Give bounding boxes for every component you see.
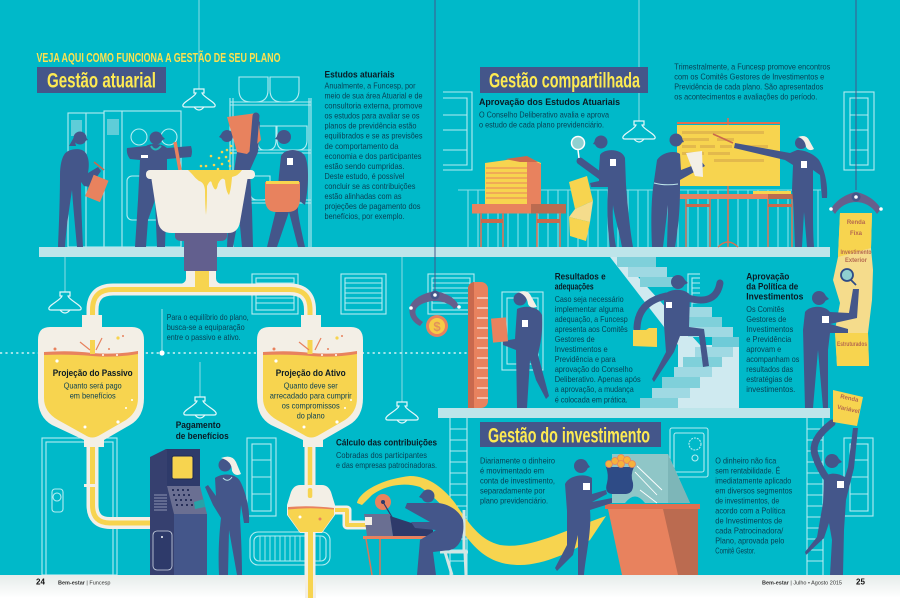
- text block: O dinheiro não fica: acordo com a Política: [715, 505, 786, 515]
- text block: Aprovação dos Estudos Atuariais: Aprovação dos Estudos Atuariais: [479, 97, 620, 108]
- text block: O dinheiro não fica: Plano, aprovada pelo: [715, 535, 785, 545]
- text block: Cálculo das contribuições: e das empresas patrocinadoras.: [336, 460, 437, 470]
- folded paper: [569, 176, 593, 241]
- label: ativo text: os compromissos: [282, 400, 340, 410]
- label: ativo text: do plano: [297, 410, 325, 420]
- text block: equilíbrio do plano: Para o equilíbrio do plano,: [167, 312, 249, 322]
- text block: Estudos atuariais: estão alinhadas com as: [324, 191, 402, 201]
- text block: Aprovação da Política de Investimentos: resultados das: [746, 364, 793, 374]
- figure: man pouring bag: [200, 113, 261, 247]
- text block: Resultados e adequações: adequação, a Funcesp: [555, 314, 628, 324]
- figure: woman on floor with clipboard: [491, 291, 549, 408]
- desk left: [472, 204, 566, 247]
- text block: Estudos atuariais: os estudos para avaliar se os: [324, 111, 420, 121]
- flask: [287, 485, 335, 598]
- panel: glass case and counter: [605, 454, 700, 575]
- hanging claw wire left with coin: [409, 0, 461, 337]
- hanging claw wire left with coin: $: [433, 319, 441, 334]
- text block: Aprovação da Política de Investimentos: Aprovação: [746, 271, 789, 282]
- title: VEJA AQUI COMO FUNCIONA A GESTÃO DE SEU PLANO: [36, 50, 281, 65]
- text block: Resultados e adequações: Previdência e para: [555, 354, 616, 364]
- label: passivo text: Projeção do Passivo: [53, 368, 133, 379]
- footer: 25: [856, 578, 865, 586]
- figure: man running up stairs with folder: [633, 275, 720, 382]
- lamps: [49, 0, 655, 423]
- icon: magnifier on strip: [841, 269, 856, 285]
- text block: Aprovação dos Estudos Atuariais: O Conselho Deliberativo avalia e aprova: [479, 110, 609, 120]
- pot stem and column: [175, 233, 227, 271]
- figure: man reaching magnifier: [803, 269, 859, 408]
- text block: Estudos atuariais: meio de sua área Atuarial e de: [324, 91, 423, 101]
- text block: Cálculo das contribuições: [336, 438, 437, 470]
- staircase: [610, 257, 739, 408]
- figure: woman pointing: [713, 134, 827, 247]
- text block: Pagamento de benefícios: [176, 420, 229, 442]
- dotted balance line: [0, 309, 468, 356]
- wall fixtures: lockers, shelves, windows, vents: [42, 77, 874, 575]
- text block: Aprovação da Política de Investimentos: Gestores de: [746, 314, 787, 324]
- paper: Renda Variável: [833, 390, 863, 426]
- heading: Gestão do investimento: Gestão do investimento: [488, 425, 650, 448]
- text block: Aprovação dos Estudos Atuariais: o estudo de cada plano previdenciário.: [479, 120, 604, 130]
- text block: Diariamente: [480, 455, 555, 505]
- text block: Aprovação dos Estudos Atuariais: [479, 97, 620, 130]
- flipchart: [677, 118, 780, 247]
- text block: Estudos atuariais: projeções de pagamento dos: [324, 201, 420, 211]
- text block: Resultados e adequações: [555, 271, 641, 404]
- text block: O dinheiro não fica: [715, 455, 792, 555]
- paper: Renda Variável: Variável: [836, 405, 860, 415]
- label: ativo text: arrecadado para cumprir: [270, 390, 352, 400]
- text block: Estudos atuariais: [324, 70, 423, 221]
- heading: Gestão do investimento: [480, 422, 661, 448]
- text block: equilíbrio do plano: busca-se a equiparação: [167, 322, 245, 332]
- footer: Bem-estar | Julho • Agosto 2015: [762, 580, 842, 586]
- footer: Bem-estar | Funcesp: [58, 580, 110, 586]
- text block: Diariamente: Diariamente o dinheiro: [480, 455, 555, 465]
- text block: Diariamente: é movimentado em: [480, 465, 544, 475]
- text block: O dinheiro não fica: cada Patrocinadora/: [715, 525, 784, 535]
- text block: Resultados e adequações: Investimentos e: [555, 344, 608, 354]
- text block: Aprovação da Política de Investimentos: Investimentos: [746, 291, 803, 302]
- text block: Trimestralmente: [674, 62, 830, 102]
- panel: typewriter station: [363, 490, 468, 575]
- icon: folder: [633, 328, 657, 347]
- text block: Pagamento de benefícios: Pagamento: [176, 420, 221, 431]
- panel: ATM: [150, 449, 207, 575]
- text block: Resultados e adequações: apresenta aos Comitês: [555, 324, 628, 334]
- text block: O dinheiro não fica: sem rentabilidade. É: [715, 465, 781, 475]
- heading: Gestão compartilhada: [480, 67, 648, 93]
- icon: pot of coins: [606, 454, 636, 494]
- text block: Resultados e adequações: Resultados e: [555, 271, 606, 282]
- upper and lower floors: [39, 247, 830, 418]
- text block: Aprovação da Política de Investimentos: Os Comitês: [746, 304, 784, 314]
- paper: Renda Variável: Renda: [840, 394, 859, 404]
- claw with hanging paper: [829, 0, 883, 366]
- heading: Gestão compartilhada: Gestão compartilhada: [489, 70, 640, 92]
- text block: Trimestralmente: os acontecimentos e avaliações do período.: [674, 92, 817, 102]
- paper: Renda Fixa strip: Exterior: [845, 258, 868, 264]
- text block: O dinheiro não fica: Comitê Gestor.: [715, 545, 755, 555]
- text block: Diariamente: plano previdenciário.: [480, 495, 548, 505]
- text block: Pagamento de benefícios: de benefícios: [176, 431, 229, 442]
- label: ativo text: Quanto deve ser: [284, 380, 338, 390]
- paper: Renda Fixa strip: Investimento: [840, 250, 872, 256]
- text block: Estudos atuariais: benefícios, por exemplo.: [324, 211, 404, 221]
- footer: [0, 575, 900, 598]
- text block: O dinheiro não fica: de investimentos, de: [715, 495, 780, 505]
- text block: Estudos atuariais: de comportamento da: [324, 141, 399, 151]
- text block: O dinheiro não fica: imediatamente aplicado: [715, 475, 792, 485]
- text block: Estudos atuariais: equilibrados e se as previsões: [324, 131, 422, 141]
- text block: equilíbrio do plano: entre o passivo e ativo.: [167, 332, 241, 342]
- text block: Resultados e adequações: adequações: [555, 281, 594, 292]
- text block: Estudos atuariais: Deste estudo, é possível: [324, 171, 405, 181]
- text block: Trimestralmente: Trimestralmente, a Funcesp promove encontros: [674, 62, 830, 72]
- text block: Resultados e adequações: é colocada em prática.: [555, 394, 628, 404]
- paper: Renda Fixa strip: Renda: [847, 220, 866, 226]
- paper: Renda Fixa strip: Estruturados: [837, 342, 868, 348]
- label: passivo text: em benefícios: [70, 390, 116, 400]
- text block: Resultados e adequações: implementar alguma: [555, 304, 624, 314]
- text block: Estudos atuariais: Anualmente, a Funcesp, por: [324, 81, 416, 91]
- text block: Aprovação da Política de Investimentos: aprovam e: [746, 344, 782, 354]
- text block: Resultados e adequações: aprovação do Conselho: [555, 364, 633, 374]
- label: ativo text: Projeção do Ativo: [276, 368, 346, 379]
- figure: typist: [405, 490, 463, 575]
- figure: man with spoon: [127, 132, 192, 247]
- icon: magnifier: [572, 136, 584, 158]
- table right: [678, 191, 802, 247]
- text block: O dinheiro não fica: de Investimentos de: [715, 515, 783, 525]
- label: passivo text: Quanto será pago: [64, 380, 122, 390]
- text block: O dinheiro não fica: O dinheiro não fica: [715, 455, 777, 465]
- footer: 24: [36, 578, 45, 586]
- text block: Estudos atuariais: consultoria externa, promove: [324, 101, 423, 111]
- text block: Aprovação da Política de Investimentos: estratégias de: [746, 374, 793, 384]
- text block: Resultados e adequações: Caso seja necessário: [555, 294, 624, 304]
- text block: Cálculo das contribuições: Cálculo das contribuições: [336, 438, 437, 449]
- figure: woman with clipboard: [58, 132, 109, 247]
- text block: Estudos atuariais: Estudos atuariais: [324, 70, 394, 81]
- figure: man with bowl: [265, 130, 308, 247]
- text block: Aprovação da Política de Investimentos: investimentos.: [746, 384, 795, 394]
- heading: Gestão atuarial: Gestão atuarial: [47, 70, 156, 92]
- figure: jumping man with paper: [805, 390, 863, 575]
- text block: Diariamente: separadamente por: [480, 485, 545, 495]
- figure: man reading paper: [651, 134, 705, 247]
- ribbon of paper: [357, 476, 606, 565]
- stack of reports: [485, 156, 541, 204]
- heading: Gestão atuarial: [37, 67, 166, 93]
- figure: magnifier man: [572, 136, 633, 247]
- text block: Resultados e adequações: Gestores de: [555, 334, 595, 344]
- figure: woman at ATM: [205, 457, 249, 575]
- panel: bag Projeção do Passivo: [38, 315, 144, 447]
- text block: Aprovação da Política de Investimentos: da Política de: [746, 281, 798, 292]
- text block: Aprovação da Política de Investimentos: e Previdência: [746, 334, 792, 344]
- panel: bag Projeção do Ativo: [257, 315, 363, 447]
- ruler: [468, 282, 488, 408]
- text block: Estudos atuariais: concluir se as contribuições: [324, 181, 416, 191]
- text block: Estudos atuariais: planos de previdência estão: [324, 121, 417, 131]
- label: passivo text: [53, 368, 133, 400]
- paper: Renda Fixa strip: [833, 213, 873, 366]
- text block: Resultados e adequações: Deliberativo. Apenas após: [555, 374, 641, 384]
- text block: equilíbrio do plano: [167, 312, 249, 342]
- text block: Cálculo das contribuições: Cobradas dos participantes: [336, 450, 427, 460]
- text block: O dinheiro não fica: em diversos segmentos: [715, 485, 792, 495]
- label: ativo text: [270, 368, 352, 420]
- panel: mixing pot: [146, 170, 255, 233]
- text block: Estudos atuariais: estão sendo cumpridas.: [324, 161, 404, 171]
- text block: Resultados e adequações: a aprovação, a mudança: [555, 384, 634, 394]
- text block: Aprovação da Política de Investimentos: [746, 271, 803, 394]
- text block: Estudos atuariais: economia e dos participantes: [324, 151, 422, 161]
- text block: Trimestralmente: Previdência de cada plano. São apresentados: [674, 82, 823, 92]
- figure: man with coin pot: [555, 454, 636, 575]
- text block: Aprovação da Política de Investimentos: acompanham os: [746, 354, 799, 364]
- text block: Diariamente: conta de investimento,: [480, 475, 555, 485]
- paper: Renda Fixa strip: Fixa: [850, 231, 863, 237]
- text block: Aprovação da Política de Investimentos: Investimentos: [746, 324, 793, 334]
- text block: Trimestralmente: com os Comitês Gestores de Investimentos e: [674, 72, 825, 82]
- chair: [440, 510, 468, 575]
- panel: pipes: [84, 270, 372, 598]
